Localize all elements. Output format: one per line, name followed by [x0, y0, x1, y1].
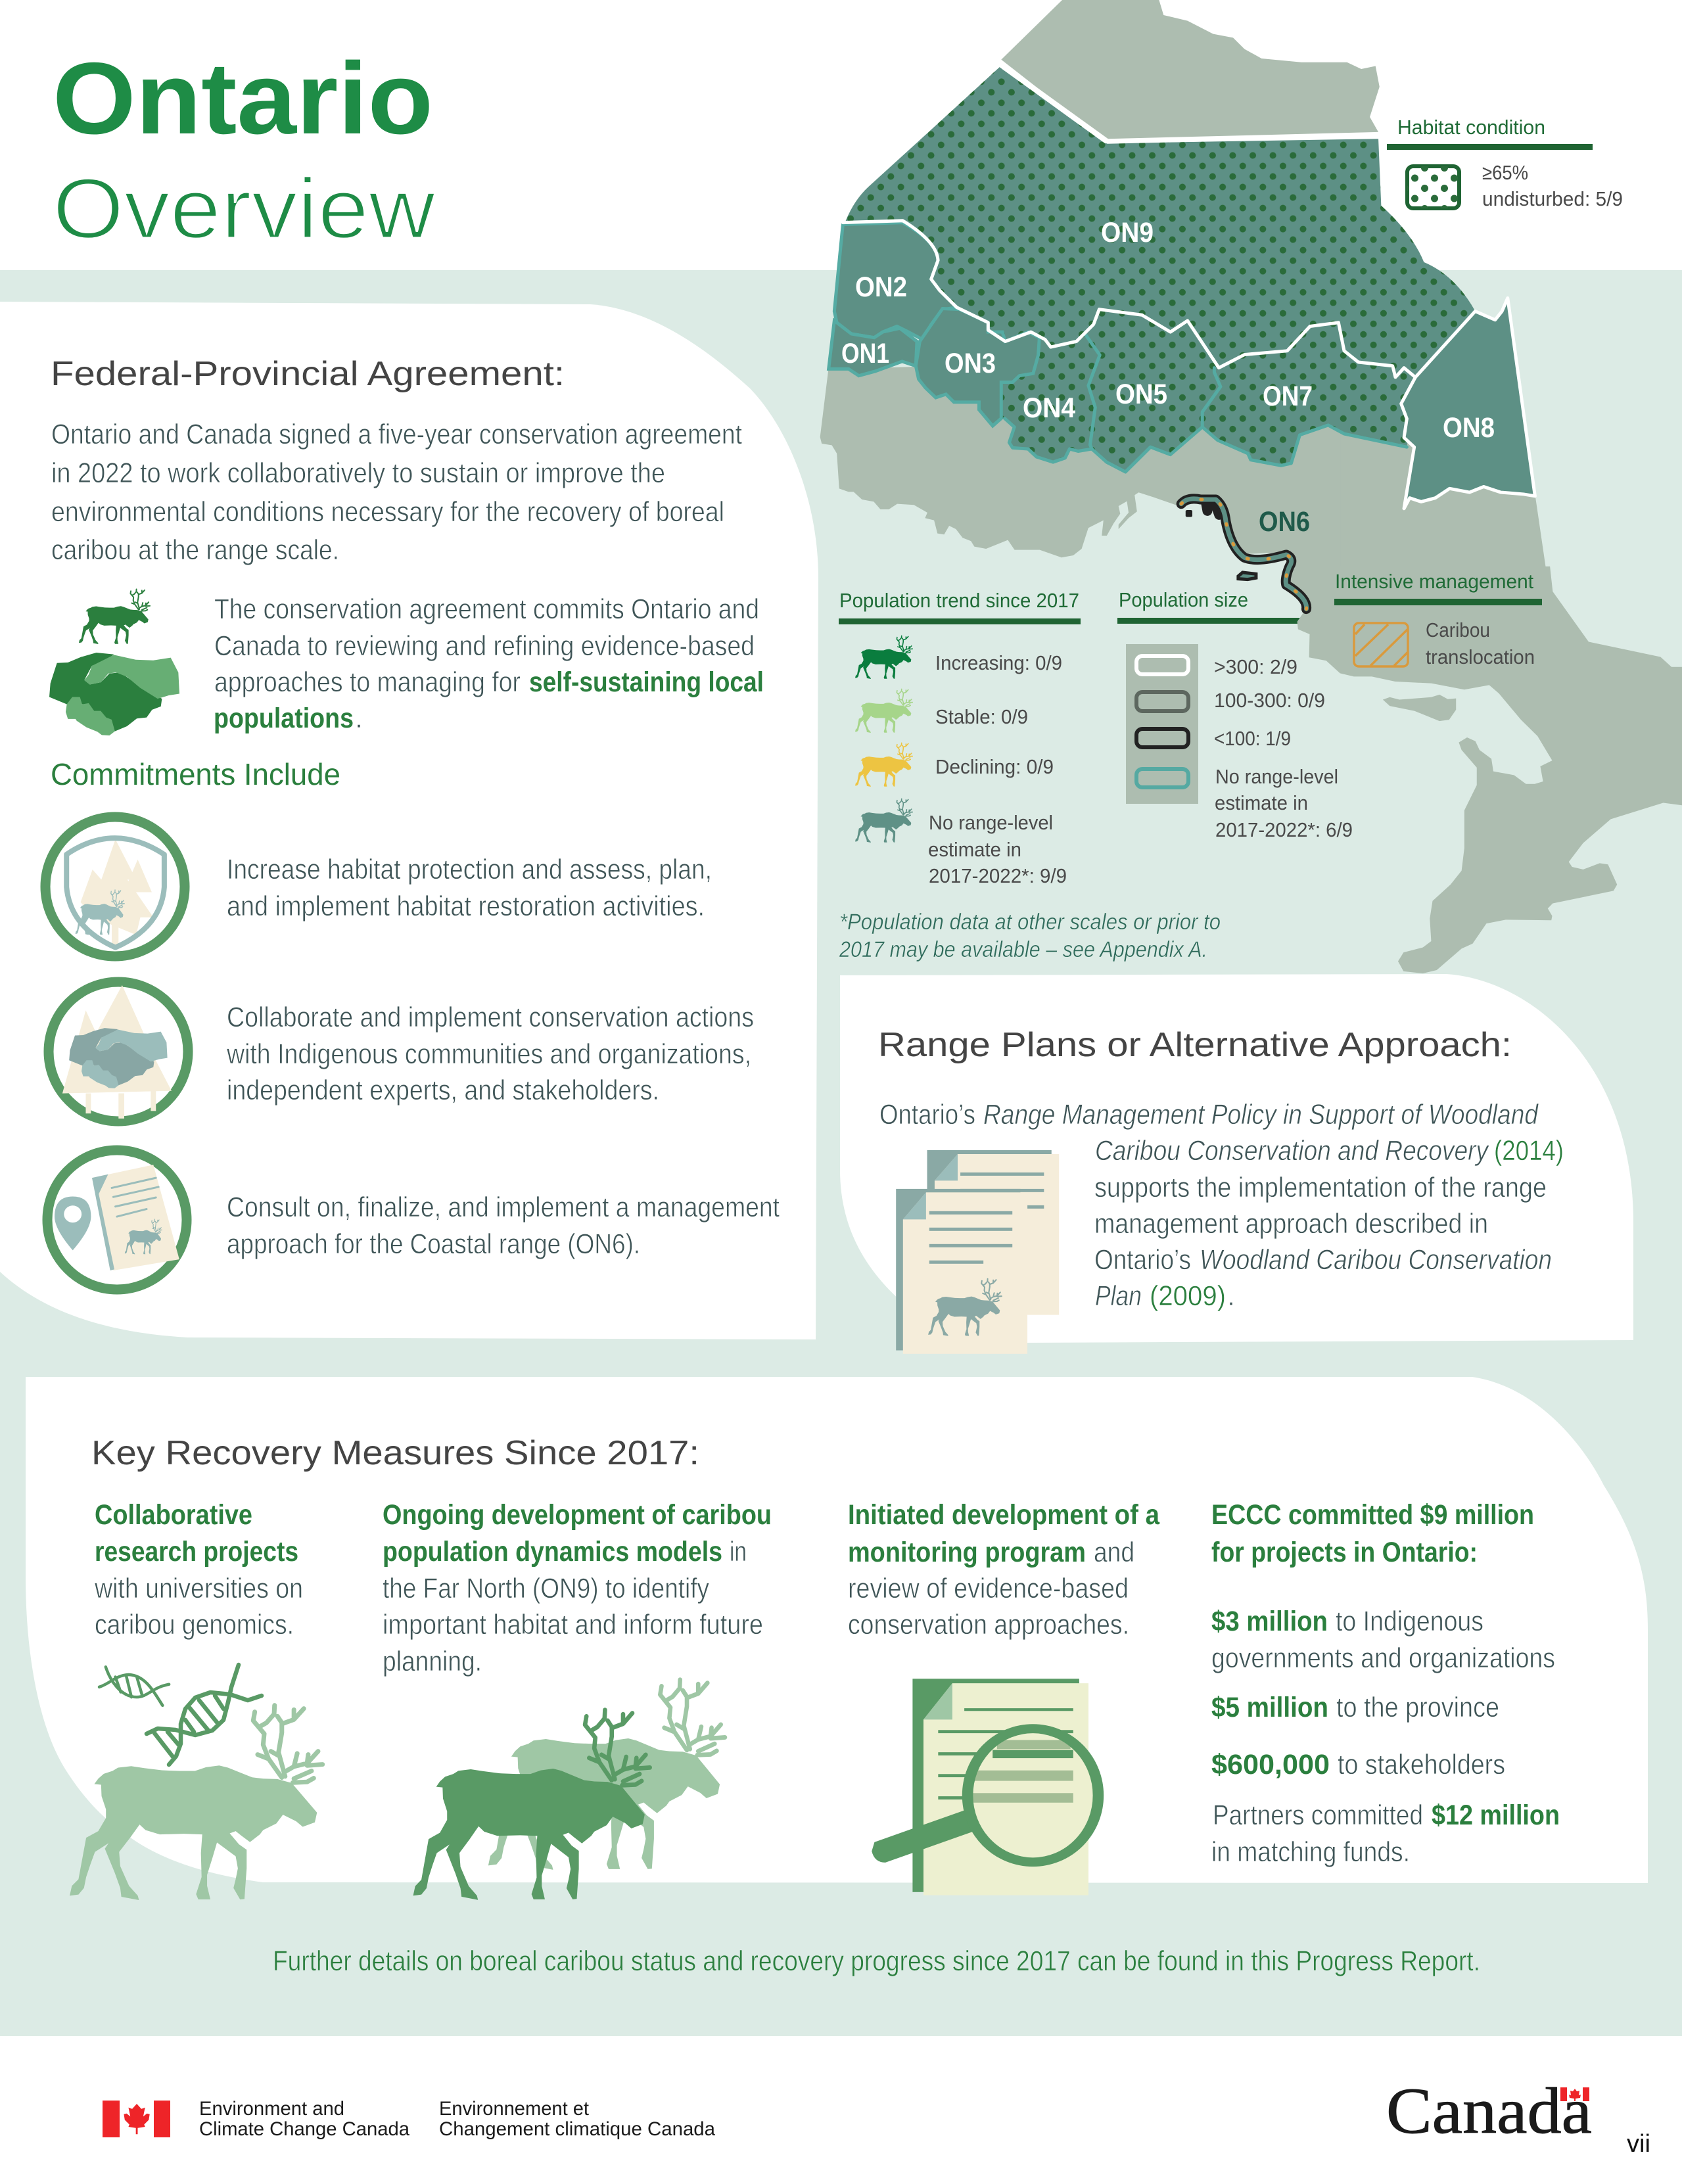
- range labels: ON1 to ON9: ON3: [945, 348, 996, 379]
- text block: agreement summary: environmental conditions necessary for the recovery of boreal: [51, 496, 724, 528]
- text block: collaborative research: research projects: [95, 1536, 298, 1568]
- legend: habitat condition: [1387, 116, 1623, 210]
- text block: agreement summary: Ontario and Canada signed a five-year conservation agreement: [51, 419, 742, 450]
- range labels: ON1 to ON9: ON8: [1443, 412, 1495, 444]
- text block: funding: $5 million: [1211, 1692, 1328, 1723]
- legend: population size: Population size: [1119, 588, 1248, 611]
- text block: range management policy: Plan: [1095, 1280, 1142, 1312]
- text block: collaborative research: Collaborative: [95, 1499, 252, 1531]
- range labels: ON1 to ON9: ON5: [1115, 379, 1167, 410]
- text block: management approach commitment: [227, 1192, 780, 1260]
- range: ON2: [834, 223, 957, 340]
- panel: key recovery measures: [26, 1377, 1648, 1900]
- text block: range management policy: Ontario’s: [1094, 1244, 1191, 1276]
- legend: population size: <100: 1/9: [1214, 727, 1291, 750]
- text block: collaborative research: [94, 1499, 303, 1640]
- panel: range plans or alternative approach: [840, 974, 1633, 1354]
- legend: population size: 2017-2022*: 6/9: [1215, 818, 1353, 841]
- ranges: [829, 64, 1535, 509]
- range: ON3: [916, 309, 1039, 426]
- icon: dna strands: [99, 1665, 262, 1765]
- footnote: 2017 may be available – see Appendix A.: [839, 937, 1207, 962]
- legend: intensive management: translocation: [1426, 645, 1535, 668]
- icon: two caribou: [413, 1680, 725, 1900]
- legend: population size: [1119, 588, 1353, 841]
- icon: Canadian flag: [103, 2101, 170, 2137]
- land: surrounding Ontario: [820, 0, 1682, 973]
- range labels: ON1 to ON9: ON7: [1263, 381, 1313, 412]
- footnote: *Population data at other scales or prior to: [839, 910, 1221, 935]
- text block: range management policy: (2014): [1494, 1135, 1564, 1167]
- text block: monitoring program: review of evidence-based: [848, 1573, 1129, 1604]
- text block: range management policy: Ontario’s: [879, 1099, 975, 1130]
- range: ON8: [1401, 298, 1535, 509]
- title: Ontario: [53, 41, 433, 155]
- heading: key recovery measures: Key Recovery Measures Since 2017:: [91, 1434, 699, 1472]
- logo: Government of Canada signature: Environment and: [199, 2098, 344, 2120]
- text block: population dynamics models: Ongoing development of caribou: [383, 1499, 772, 1531]
- legend: population trend: Stable: 0/9: [935, 705, 1028, 728]
- text block: habitat commitment: Increase habitat protection and assess, plan,: [227, 854, 712, 885]
- range labels: ON1 to ON9: ON9: [1101, 217, 1154, 248]
- text block: conservation agreement commitment: populations: [214, 703, 354, 734]
- text block: conservation agreement commitment: approaches to managing for: [214, 666, 521, 698]
- legend: population trend: estimate in: [928, 838, 1021, 861]
- text block: agreement summary: caribou at the range scale.: [51, 534, 339, 566]
- range boundaries: [843, 64, 1415, 472]
- legend: population size: No range-level: [1215, 765, 1338, 788]
- text block: management approach commitment: Consult on, finalize, and implement a management: [227, 1192, 780, 1223]
- text block: collaboration commitment: Collaborate and implement conservation actions: [227, 1002, 754, 1033]
- text block: funding: for projects in Ontario:: [1211, 1537, 1478, 1568]
- text block: funding: $600,000: [1211, 1749, 1330, 1780]
- range labels: ON1 to ON9: ON1: [841, 338, 889, 369]
- logo: Government of Canada signature: Changement climatique Canada: [439, 2118, 715, 2140]
- icon: caribou above handshake: [49, 589, 179, 735]
- legend: habitat condition: Habitat condition: [1397, 116, 1545, 139]
- text block: funding: Partners committed: [1213, 1800, 1423, 1831]
- text block: conservation agreement commitment: Canada to reviewing and refining evidence-based: [214, 630, 755, 662]
- text block: monitoring program: monitoring program: [848, 1537, 1086, 1568]
- text block: population dynamics models: in: [730, 1536, 747, 1568]
- legend: population trend: Population trend since 2017: [839, 589, 1079, 612]
- text block: management approach commitment: approach for the Coastal range (ON6).: [227, 1228, 640, 1260]
- text block: range management policy: management approach described in: [1094, 1208, 1488, 1240]
- text block: conservation agreement commitment: The conservation agreement commits Ontario and: [214, 593, 759, 625]
- footnote: [839, 910, 1221, 962]
- legend: intensive management: Caribou: [1426, 618, 1490, 641]
- text block: collaborative research: with universities on: [94, 1573, 303, 1604]
- logo: Government of Canada signature: Environnement et: [439, 2098, 590, 2120]
- icon: caribou: [70, 1706, 323, 1900]
- icon: document and map pin: [47, 1150, 187, 1289]
- text block: agreement summary: [51, 419, 742, 566]
- text block: agreement summary: in 2022 to work collaboratively to sustain or improve the: [51, 457, 665, 489]
- heading: federal-provincial agreement: Federal-Provincial Agreement:: [51, 355, 565, 393]
- text block: collaboration commitment: independent experts, and stakeholders.: [227, 1075, 659, 1106]
- text block: range management policy: Range Management Policy in Support of Woodland: [983, 1099, 1539, 1130]
- logo: Canada wordmark: Canada: [1386, 2074, 1592, 2147]
- text block: population dynamics models: planning.: [383, 1646, 482, 1677]
- logo: Government of Canada signature: [103, 2098, 715, 2140]
- text block: conservation agreement commitment: self-sustaining local: [529, 666, 764, 698]
- text block: funding: $3 million: [1211, 1606, 1328, 1637]
- legend: population size: >300: 2/9: [1214, 655, 1297, 678]
- text block: range management policy: .: [1227, 1280, 1235, 1312]
- text block: habitat commitment: and implement habitat restoration activities.: [227, 891, 705, 922]
- text block: monitoring program: and: [1094, 1537, 1134, 1568]
- legend bar: population size: [1117, 618, 1301, 624]
- legend: population size: estimate in: [1215, 791, 1308, 814]
- text block: population dynamics models: the Far North (ON9) to identify: [383, 1573, 709, 1604]
- range labels: ON1 to ON9: ON4: [1023, 392, 1075, 424]
- title: [53, 41, 436, 256]
- text block: range management policy: (2009): [1150, 1280, 1226, 1312]
- icon: stacked documents with caribou: [896, 1150, 1059, 1354]
- text block: funding: $12 million: [1432, 1800, 1560, 1831]
- range labels: ON1 to ON9: ON6: [1259, 506, 1310, 538]
- text block: funding: to the province: [1336, 1692, 1499, 1723]
- legend: habitat condition: undisturbed: 5/9: [1482, 187, 1623, 210]
- text block: collaboration commitment: [226, 1002, 754, 1106]
- range labels: ON1 to ON9: [841, 217, 1495, 538]
- legend: population trend: 2017-2022*: 9/9: [929, 864, 1067, 887]
- text block: range management policy: Caribou Conservation and Recovery: [1095, 1135, 1489, 1167]
- text block: monitoring program: [848, 1499, 1160, 1640]
- range: ON9, ON4, ON5, ON7 with dotted pattern: [846, 67, 1475, 472]
- text block: range management policy: [879, 1099, 1564, 1312]
- legend: population trend: [839, 589, 1081, 887]
- text block: funding: to stakeholders: [1338, 1749, 1505, 1780]
- text block: conservation agreement commitment: .: [355, 703, 363, 734]
- text block: monitoring program: conservation approaches.: [848, 1609, 1129, 1640]
- text block: collaborative research: caribou genomics.: [95, 1609, 294, 1640]
- page number: vii: [1627, 2130, 1650, 2158]
- legend: population size: 100-300: 0/9: [1214, 689, 1325, 712]
- icon: hatched translocation swatch: [1354, 623, 1408, 666]
- text block: population dynamics models: important habitat and inform future: [383, 1609, 763, 1640]
- icon: handshake with trees: [49, 982, 188, 1121]
- heading: range plans: Range Plans or Alternative Approach:: [878, 1026, 1512, 1064]
- title: Overview: [53, 160, 436, 256]
- icon: dotted habitat swatch: [1407, 166, 1459, 208]
- icon: shield with trees and caribou: [45, 817, 185, 956]
- icon: document and magnifying glass: [872, 1679, 1098, 1895]
- logo: Government of Canada signature: Climate Change Canada: [199, 2118, 409, 2140]
- text block: funding: ECCC committed $9 million: [1211, 1499, 1534, 1531]
- legend: intensive management: Intensive management: [1335, 570, 1533, 593]
- legend: population trend: No range-level: [929, 811, 1053, 834]
- legend: population trend: Increasing: 0/9: [935, 651, 1062, 674]
- range: ON6: [1181, 499, 1307, 609]
- text block: range management policy: supports the implementation of the range: [1094, 1172, 1547, 1203]
- text block: funding: governments and organizations: [1211, 1642, 1555, 1674]
- text block: population dynamics models: [383, 1499, 772, 1677]
- text block: funding: in matching funds.: [1211, 1836, 1410, 1868]
- text block: population dynamics models: population dynamics models: [383, 1536, 722, 1568]
- heading: commitments include: Commitments Include: [51, 757, 340, 791]
- text block: funding: [1211, 1499, 1560, 1868]
- text block: habitat commitment: [227, 854, 712, 922]
- text block: further details link: Further details on boreal caribou status and recovery progress since 2017 can be found in this Progress Report.: [273, 1945, 1480, 1977]
- panel: federal-provincial agreement: [0, 302, 818, 1339]
- legend: intensive management: [1334, 570, 1542, 668]
- map: Ontario ranges: [820, 0, 1682, 973]
- text block: range management policy: Woodland Caribou Conservation: [1200, 1244, 1552, 1276]
- text block: collaboration commitment: with Indigenous communities and organizations,: [226, 1038, 751, 1070]
- legend: population trend: Declining: 0/9: [935, 755, 1054, 778]
- text block: conservation agreement commitment: [214, 593, 764, 734]
- text block: monitoring program: Initiated development of a: [848, 1499, 1160, 1531]
- range labels: ON1 to ON9: ON2: [855, 271, 907, 303]
- text block: funding: to Indigenous: [1336, 1606, 1483, 1637]
- range: ON1: [829, 321, 917, 376]
- legend: habitat condition: ≥65%: [1482, 161, 1528, 184]
